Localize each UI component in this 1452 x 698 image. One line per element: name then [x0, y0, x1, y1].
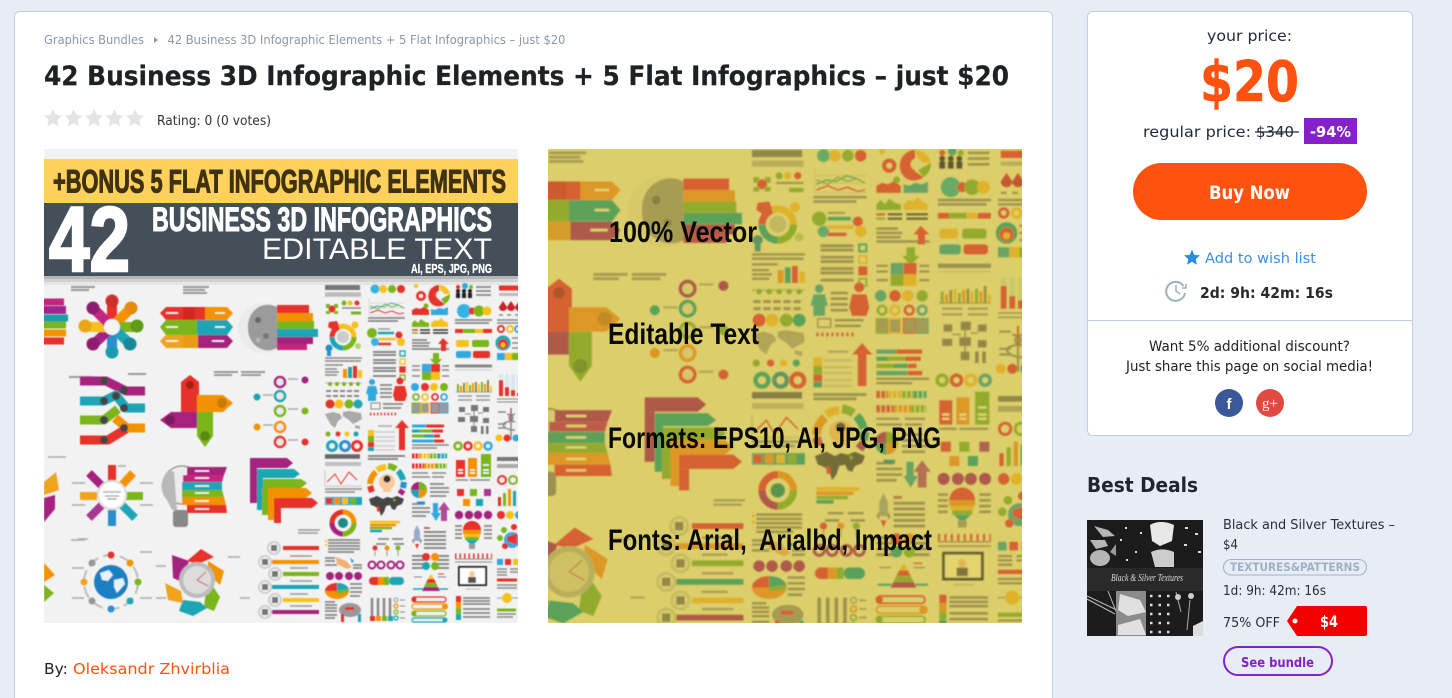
zig-zag ribbons [80, 381, 145, 440]
buy now button [1133, 163, 1367, 220]
banner: 42 business 3D infographics: AI, EPS, JPG, PNG [411, 261, 492, 276]
banner: 42 business 3D infographics: BUSINESS 3D INFOGRAPHICS [152, 201, 492, 239]
author line: By: [44, 660, 68, 678]
banner: bonus [44, 159, 518, 203]
puzzle block [160, 307, 233, 348]
countdown: 2d: 9h: 42m: 16s [1200, 284, 1333, 302]
regular price [1143, 123, 1299, 141]
regular price: $340 [1256, 123, 1294, 141]
ring nodes [275, 377, 285, 447]
octagon ring [80, 465, 143, 526]
deal discount: 75% OFF [1223, 615, 1280, 631]
share discount text: Just share this page on social media! [1125, 359, 1373, 375]
column 3 infographics [411, 284, 450, 622]
see bundle button: See bundle [1241, 655, 1314, 671]
feature: editable text: Editable Text [608, 318, 759, 351]
feature: fonts: Fonts: Arial, Arialbd, Impact [608, 524, 932, 557]
small headings [69, 287, 265, 377]
icon: google plus [1256, 389, 1284, 417]
share discount text: Want 5% additional discount? [1149, 339, 1350, 355]
thumbnail title: Black & Silver Textures [1111, 573, 1183, 584]
banner: 42 business 3D infographics: 42 [49, 189, 130, 291]
icon: clock [1166, 282, 1186, 301]
deal title: Black and Silver Textures – [1223, 517, 1395, 533]
column 1 infographics [325, 288, 362, 622]
gear flower [106, 304, 118, 320]
share discount text [1125, 339, 1373, 375]
discount badge [1304, 118, 1357, 144]
rating text: Rating: 0 (0 votes) [157, 114, 271, 129]
rating stars [44, 109, 144, 126]
panel: deal item [1087, 517, 1395, 675]
column 4 infographics [454, 283, 492, 620]
wish list link: Add to wish list [1205, 251, 1316, 267]
discount badge: -94% [1310, 123, 1351, 141]
panel: main product card [14, 12, 1052, 698]
buy now button: Buy Now [1209, 183, 1290, 204]
breadcrumb: 42 Business 3D Infographic Elements + 5 Flat Infographics – just $20 [168, 32, 566, 47]
feature: formats: Formats: EPS10, AI, JPG, PNG [608, 422, 941, 455]
deal countdown: 1d: 9h: 42m: 16s [1223, 583, 1326, 599]
banner: 42 business 3D infographics: EDITABLE TEXT [262, 233, 492, 266]
category tag: TEXTURES&PATTERNS [1230, 560, 1360, 574]
deal thumbnail [1087, 520, 1203, 636]
heading: best deals: Best Deals [1087, 473, 1198, 497]
see bundle button [1224, 647, 1332, 675]
left partial hexes [44, 472, 59, 602]
clock flower [165, 549, 224, 616]
breadcrumb: Graphics Bundles [44, 32, 144, 47]
banner: 42 business 3D infographics [44, 203, 518, 285]
house arrows [160, 375, 233, 447]
deal title: $4 [1223, 537, 1238, 553]
far-left ribbons [40, 298, 64, 306]
title: 42 Business 3D Infographic Elements + 5 Flat Infographics – just $20 [44, 61, 1009, 92]
column 5 infographics [496, 288, 523, 617]
regular price: regular price: [1143, 123, 1251, 141]
globe ring [84, 555, 138, 609]
pin lines [272, 548, 319, 612]
icon: google plus: g+ [1262, 396, 1278, 412]
icon: facebook [1215, 389, 1243, 417]
banner: bonus: +BONUS 5 FLAT INFOGRAPHIC ELEMENTS [53, 164, 506, 200]
deal price tag [1287, 606, 1367, 636]
brain with ribbons [238, 303, 318, 353]
author line: Oleksandr Zhvirblia [73, 660, 230, 678]
deal price tag: $4 [1320, 612, 1338, 631]
feature: vector: 100% Vector [609, 216, 757, 249]
price: $20 [1200, 50, 1299, 115]
infographic mosaic [40, 283, 523, 622]
light bulb with ribbons [162, 466, 227, 527]
stair arrows [250, 458, 318, 523]
deal title [1223, 517, 1395, 553]
product image: features on yellow [548, 149, 1022, 623]
icon: facebook: f [1226, 396, 1232, 413]
panel: price box [1088, 12, 1412, 436]
your price label: your price: [1207, 27, 1292, 45]
product image: 42 business infographics [40, 149, 523, 623]
column 2 infographics [366, 284, 409, 621]
